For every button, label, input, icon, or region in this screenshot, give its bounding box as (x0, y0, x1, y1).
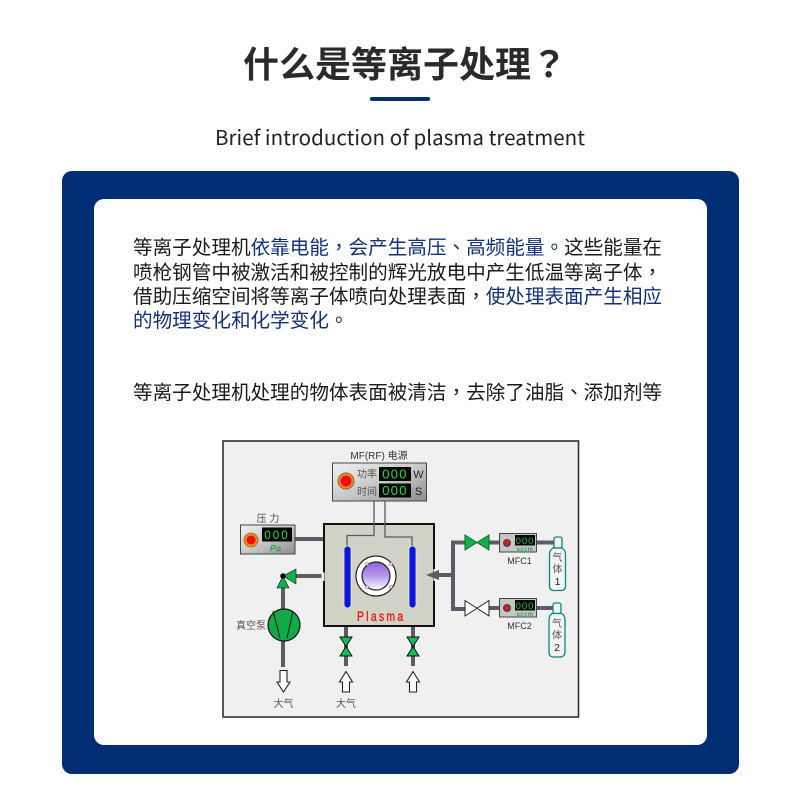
power supply unit: 功率 (357, 468, 377, 480)
panel: white inner card (94, 199, 707, 745)
pressure gauge: Pa (270, 544, 281, 554)
viewing window (356, 556, 396, 596)
MFC1 controller: sccm (517, 547, 533, 553)
text block: plasma machine introduction: 的物理变化和化学变化。 (133, 304, 349, 333)
pressure gauge: 000 (264, 530, 290, 542)
title: 什么是等离子处理？ (243, 36, 567, 88)
MFC1 controller: MFC1 (507, 556, 532, 566)
diagram background frame (223, 441, 578, 717)
vacuum pump: 真空泵 (236, 619, 266, 632)
arrow: atmosphere in left (340, 672, 352, 692)
diagram: plasma treatment system schematic (222, 440, 580, 718)
MFC2 controller: MFC2 (507, 621, 532, 631)
panel: navy card (62, 171, 739, 774)
label: atmosphere left: 大气 (274, 697, 294, 710)
power supply unit: W (413, 469, 424, 481)
power supply unit: 000 (382, 466, 408, 482)
pipes (283, 539, 554, 667)
gas cylinder 2: 体 (552, 630, 562, 642)
arrow: atmosphere in right (406, 672, 420, 692)
power supply unit: MF(RF) 电源 (350, 449, 408, 462)
Plasma label: Plasma (357, 609, 405, 624)
MFC1 controller: 000 (516, 536, 534, 547)
gas cylinder 1: 气 (552, 551, 562, 564)
power supply unit (332, 449, 426, 501)
subtitle: Brief introduction of plasma treatment (215, 121, 585, 151)
gas cylinder 2: 气 (552, 617, 562, 630)
inlet valve left (340, 637, 352, 656)
text block: plasma machine introduction: 喷枪钢管中被激活和被控制的辉光放电中产生低温等离子体， (133, 256, 662, 285)
text block: plasma machine introduction: 借助压缩空间将等离子体喷向处理表面，使处理表面产生相应 (133, 280, 662, 309)
MFC1 controller (500, 534, 536, 566)
right electrode (409, 546, 416, 608)
arrow: exhaust to atmosphere (277, 670, 290, 692)
exhaust valve (277, 569, 296, 588)
pressure gauge: 压 力 (257, 512, 279, 525)
gas valve 1 (465, 535, 489, 550)
chamber (323, 501, 435, 626)
electrode wires (347, 501, 412, 546)
text block: plasma machine introduction (133, 231, 662, 333)
pressure gauge (240, 512, 295, 554)
power supply unit: S (415, 486, 422, 498)
MFC2 controller: 000 (516, 601, 534, 612)
gas cylinder 1: 体 (552, 564, 562, 576)
title underline (370, 97, 430, 101)
gas cylinder 1 (550, 537, 566, 590)
gas valve 2 (465, 600, 489, 616)
gas cylinder 2: 2 (554, 642, 560, 654)
power supply unit: 000 (382, 483, 408, 498)
inlet valve right (407, 637, 419, 656)
gas cylinder 2 (549, 603, 565, 657)
gas cylinder 1: 1 (555, 576, 561, 588)
arrow: gas into chamber (426, 570, 439, 580)
vacuum pump (236, 609, 300, 641)
MFC2 controller: sccm (517, 612, 533, 618)
MFC2 controller (500, 598, 536, 631)
left electrode (344, 546, 351, 608)
power supply unit: 时间 (357, 485, 377, 498)
label: atmosphere middle: 大气 (336, 697, 356, 710)
text block: plasma machine introduction: 等离子处理机依靠电能，会产生高压、高频能量。这些能量在 (133, 231, 662, 260)
text block: surface cleaning: 等离子处理机处理的物体表面被清洁，去除了油脂、添加剂等 (133, 376, 662, 405)
